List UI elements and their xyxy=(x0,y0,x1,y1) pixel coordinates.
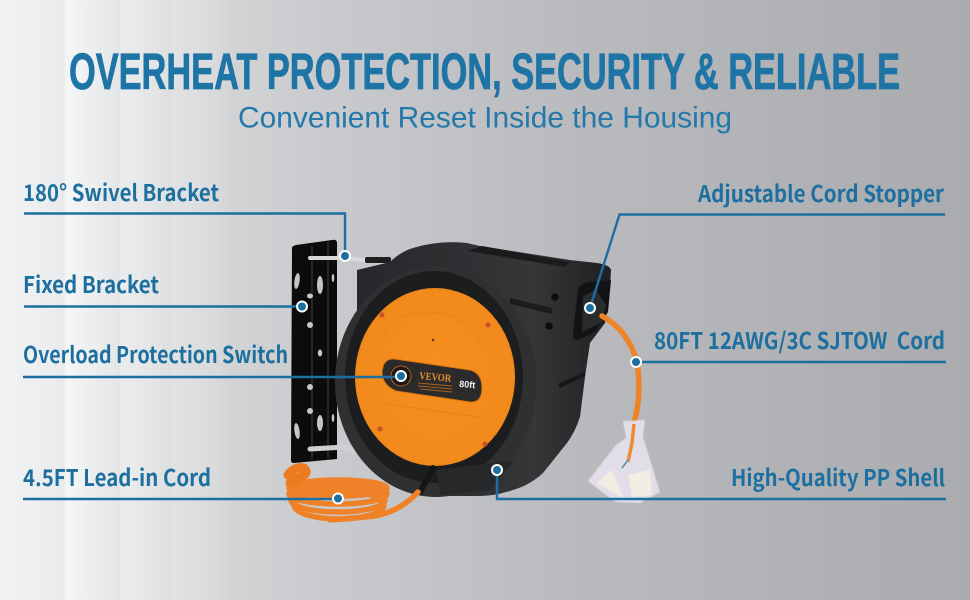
front ring xyxy=(335,267,537,497)
callout: 180 degree swivel bracket xyxy=(23,174,350,261)
control panel with brand label: 80ft xyxy=(459,379,476,391)
callout: 80ft cord xyxy=(631,322,946,367)
product: retractable cord reel xyxy=(288,240,660,520)
callout: fixed bracket xyxy=(23,266,307,312)
subtitle: Convenient Reset Inside the Housing xyxy=(238,102,732,134)
callout: adjustable cord stopper xyxy=(585,175,945,313)
lead-in cord coil xyxy=(288,468,433,520)
callout: overload protection switch xyxy=(23,336,406,381)
callout: lead-in cord: 4.5FT Lead-in Cord xyxy=(23,459,211,493)
callout: lead-in cord xyxy=(23,459,343,504)
control panel with brand label: VEVOR xyxy=(419,371,452,385)
orange cover xyxy=(355,288,515,466)
output cord and clear tri-tap plug xyxy=(588,316,660,503)
callout: PP shell xyxy=(492,459,946,499)
callout: 180 degree swivel bracket: 180° Swivel Bracket xyxy=(23,174,219,208)
callout: adjustable cord stopper: Adjustable Cord Stopper xyxy=(697,175,945,209)
callout: PP shell: High-Quality PP Shell xyxy=(731,459,945,493)
control panel with brand label xyxy=(382,359,482,402)
fixed wall bracket xyxy=(291,240,337,463)
swivel bracket arms xyxy=(310,257,391,456)
reel housing xyxy=(357,242,611,496)
callout: fixed bracket: Fixed Bracket xyxy=(23,266,159,300)
cord outlet and stopper xyxy=(573,280,611,340)
callout: overload protection switch: Overload Protection Switch xyxy=(23,336,288,370)
